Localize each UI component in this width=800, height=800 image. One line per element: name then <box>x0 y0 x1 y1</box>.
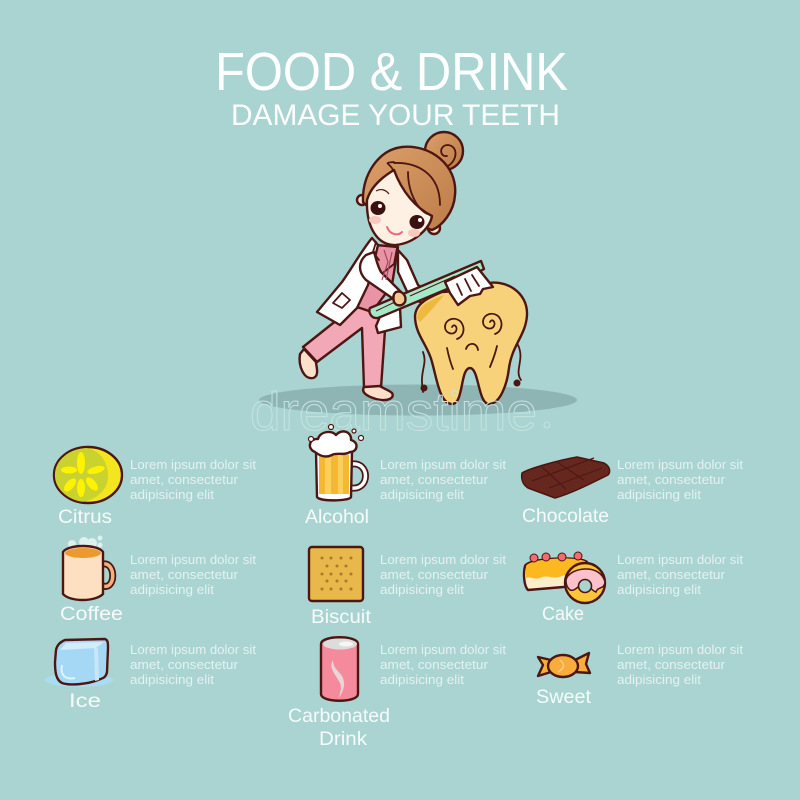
description: Lorem ipsum dolor sit <box>617 458 744 472</box>
item: chocolate <box>522 457 744 527</box>
icon: wrapped candy <box>538 653 590 677</box>
dentist <box>300 238 437 400</box>
icon: ice cube <box>45 639 113 687</box>
description: adipisicing elit <box>130 673 215 687</box>
label: Carbonated <box>288 706 390 727</box>
item: ice <box>45 639 257 712</box>
description: amet, consectetur <box>617 658 725 672</box>
icon: biscuit <box>309 547 363 601</box>
title: FOOD & DRINK <box>215 42 568 102</box>
toothbrush <box>369 261 493 318</box>
head <box>357 132 463 245</box>
description: amet, consectetur <box>130 658 238 672</box>
description: amet, consectetur <box>617 568 725 582</box>
description: Lorem ipsum dolor sit <box>130 553 257 567</box>
description: Lorem ipsum dolor sit <box>380 553 507 567</box>
icon: chocolate bar <box>522 457 610 498</box>
item: coffee <box>60 536 257 625</box>
watermark: dreamstime <box>250 382 537 442</box>
description: adipisicing elit <box>380 673 465 687</box>
label: Sweet <box>536 687 592 708</box>
icon: coffee mug <box>63 536 113 600</box>
label: Biscuit <box>311 607 372 628</box>
label: Cake <box>542 604 584 625</box>
floor shadow <box>259 384 577 416</box>
description: Lorem ipsum dolor sit <box>380 643 507 657</box>
label: Citrus <box>58 507 112 528</box>
description: amet, consectetur <box>380 473 488 487</box>
label: Drink <box>319 729 368 750</box>
description: Lorem ipsum dolor sit <box>130 458 257 472</box>
item: citrus <box>54 447 257 528</box>
title <box>215 42 568 132</box>
description: amet, consectetur <box>130 568 238 582</box>
tooth <box>415 283 527 404</box>
icon: citrus <box>54 447 122 503</box>
item: carbonated drink <box>288 637 507 750</box>
description: Lorem ipsum dolor sit <box>380 458 507 472</box>
item: sweet <box>536 643 744 708</box>
description: adipisicing elit <box>617 488 702 502</box>
description: adipisicing elit <box>130 488 215 502</box>
description: adipisicing elit <box>617 583 702 597</box>
description: Lorem ipsum dolor sit <box>617 553 744 567</box>
description: adipisicing elit <box>617 673 702 687</box>
item: cake <box>524 552 744 625</box>
label <box>288 706 390 750</box>
label: Alcohol <box>305 507 369 528</box>
title: DAMAGE YOUR TEETH <box>231 99 560 132</box>
icon: soda can <box>321 637 358 701</box>
icon: cake and donut <box>524 552 605 603</box>
label: Ice <box>69 691 101 712</box>
description: amet, consectetur <box>130 473 238 487</box>
description: Lorem ipsum dolor sit <box>617 643 744 657</box>
item: alcohol <box>305 424 507 528</box>
item: biscuit <box>309 547 507 628</box>
description: amet, consectetur <box>380 568 488 582</box>
label: Coffee <box>60 604 123 625</box>
description: adipisicing elit <box>380 488 465 502</box>
description: Lorem ipsum dolor sit <box>130 643 257 657</box>
description: amet, consectetur <box>617 473 725 487</box>
icon: beer mug <box>308 424 366 500</box>
description: amet, consectetur <box>380 658 488 672</box>
illustration: dentist brushing a tooth <box>300 132 527 404</box>
label: Chocolate <box>522 506 609 527</box>
description: adipisicing elit <box>130 583 215 597</box>
description: adipisicing elit <box>380 583 465 597</box>
